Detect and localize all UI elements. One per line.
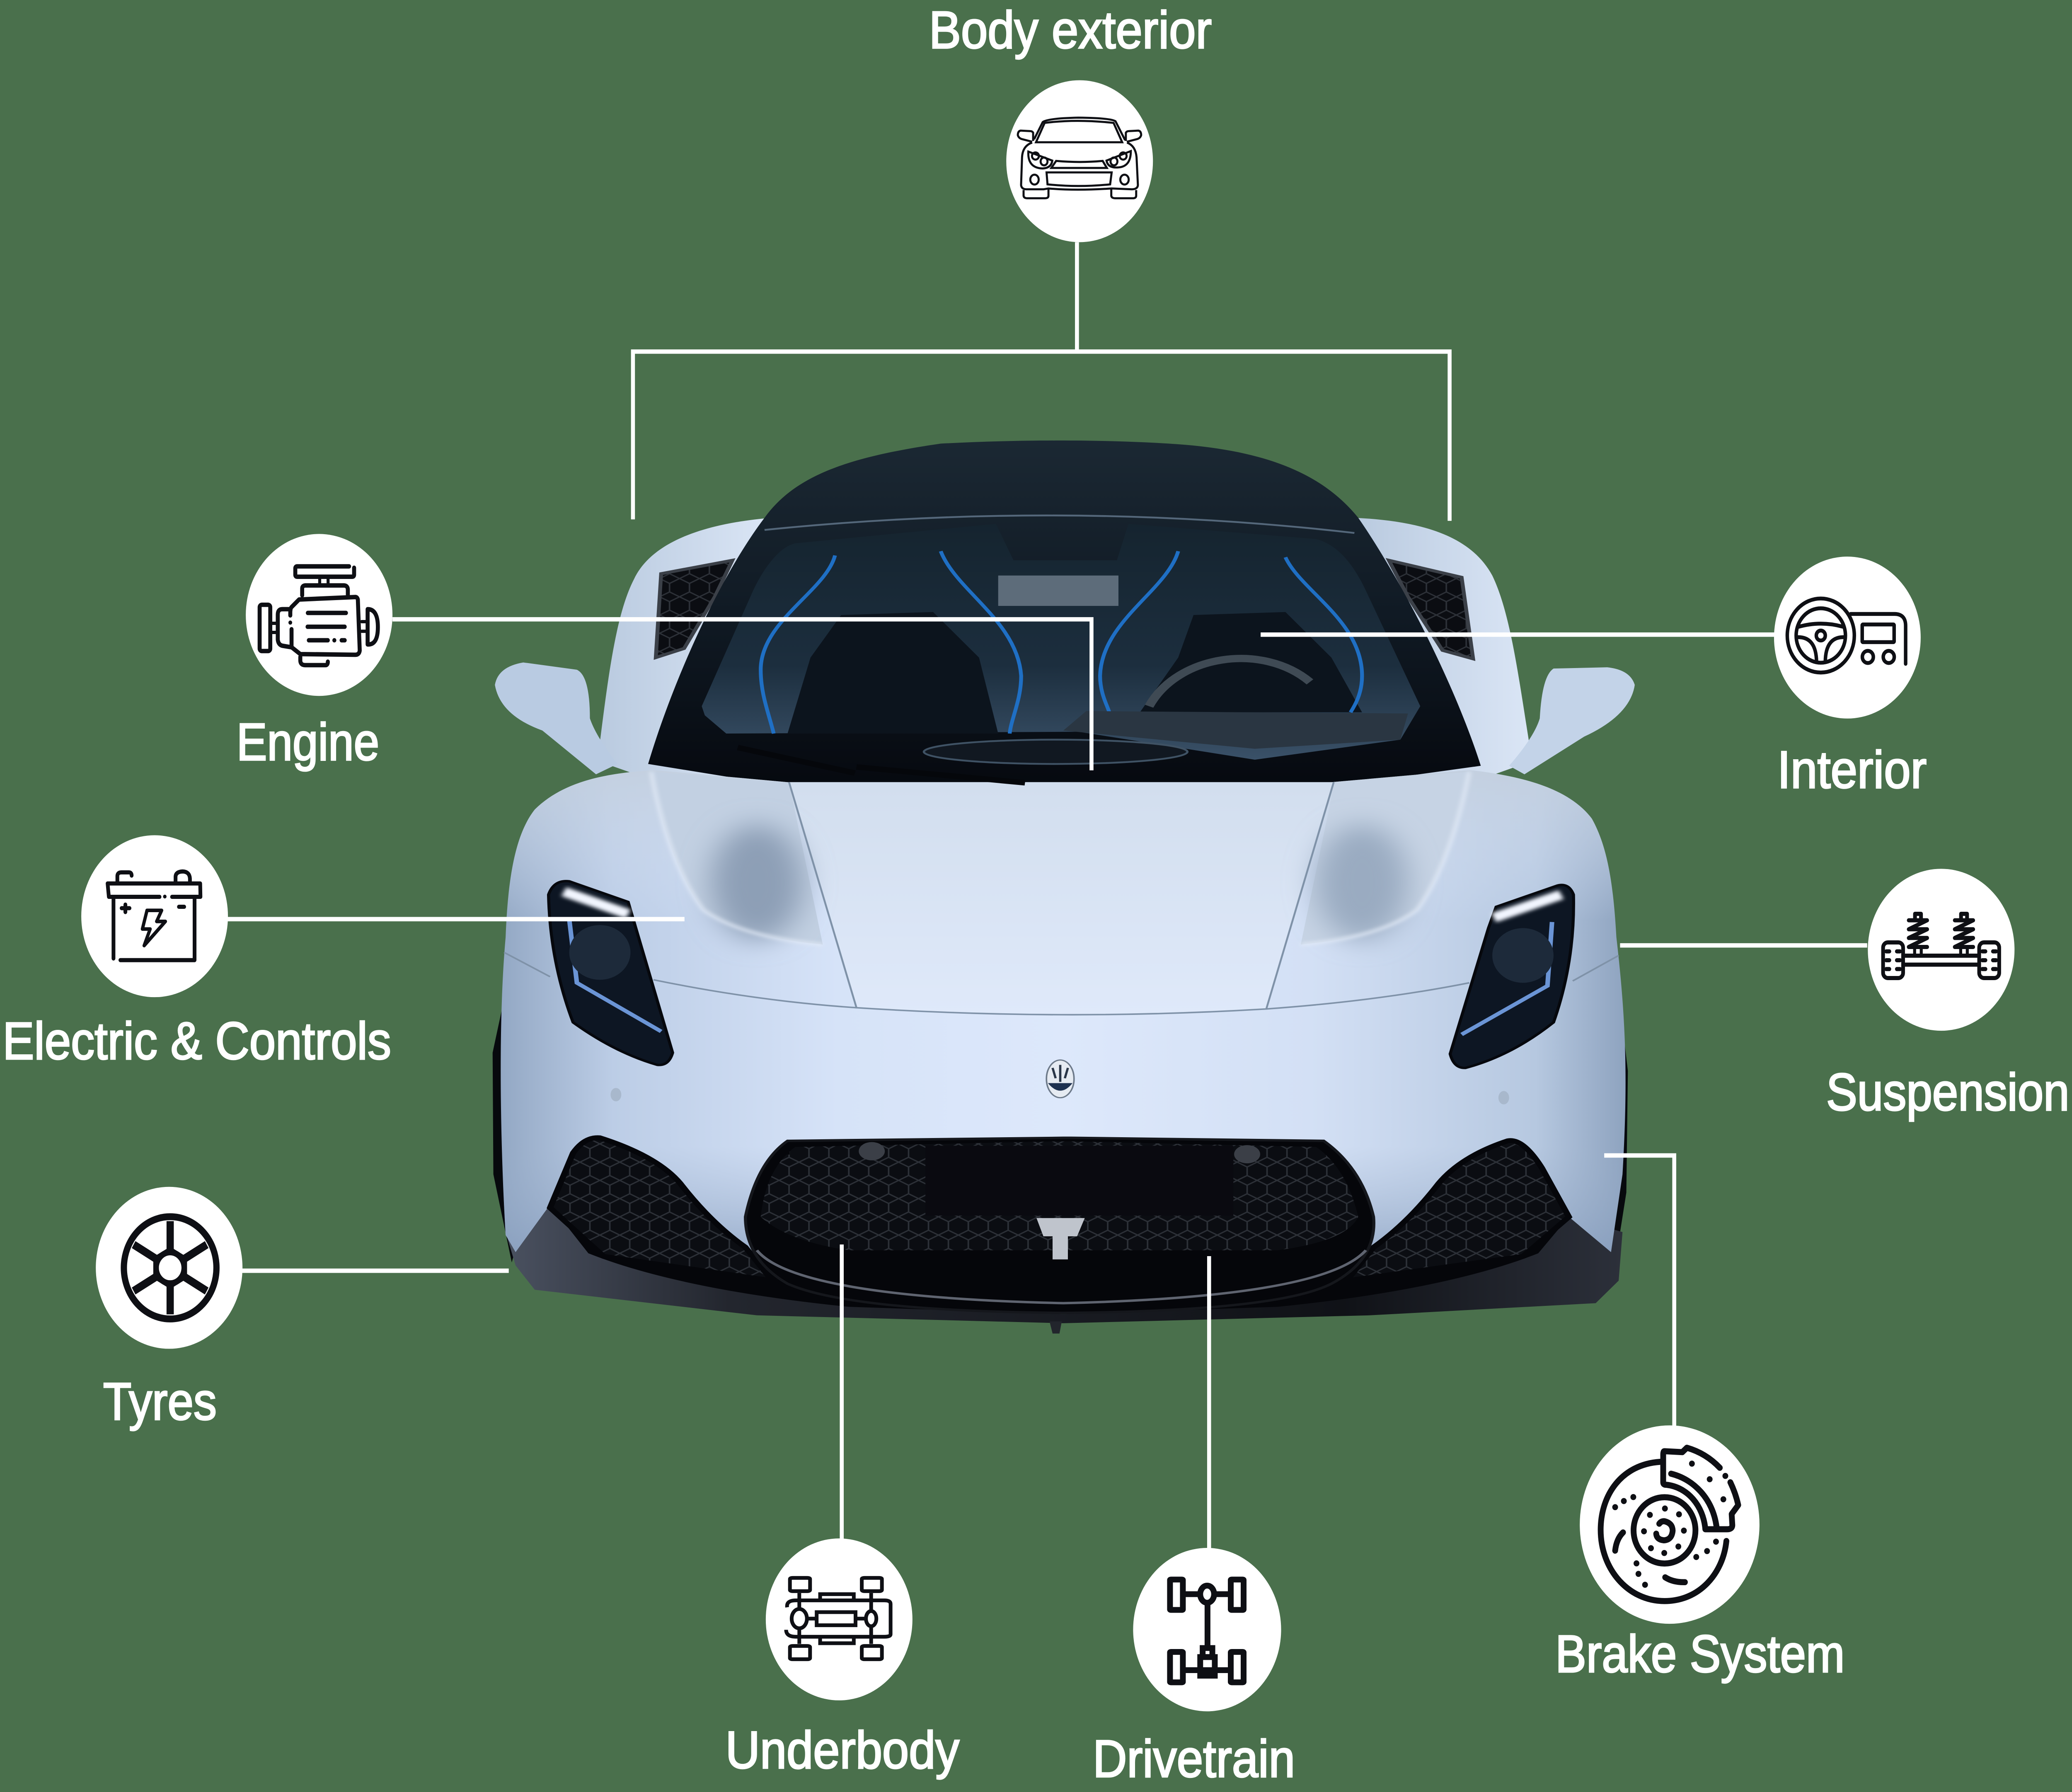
label: interior: Interior [1777, 741, 1927, 799]
connector: interior [1261, 634, 1775, 635]
connector: engine [392, 619, 1092, 770]
node: interior [1774, 557, 1927, 799]
node: brake system [1555, 1425, 1845, 1683]
label: drivetrain: Drivetrain [1093, 1729, 1295, 1788]
node: tyres [96, 1187, 242, 1431]
side air vents [656, 560, 1473, 659]
lower black underlay [550, 1205, 1569, 1312]
left air intake [550, 1138, 772, 1281]
label: tyres: Tyres [103, 1372, 217, 1431]
rear haunches [598, 518, 1532, 779]
label: brake system: Brake System [1555, 1625, 1845, 1683]
icon: battery [81, 835, 228, 997]
right bonnet scoop [1301, 772, 1469, 944]
node: drivetrain [1093, 1548, 1295, 1788]
node: engine [237, 534, 392, 771]
connector: tyres [242, 1270, 509, 1271]
label: engine: Engine [237, 713, 379, 771]
bonnet emblem [1046, 1060, 1074, 1098]
mirrors [495, 662, 1635, 774]
tow sensors [859, 1142, 885, 1160]
front grille [746, 1138, 1374, 1313]
blue seat stitching [761, 551, 1362, 734]
node: underbody [726, 1538, 960, 1780]
connector: drivetrain [1208, 1256, 1210, 1550]
connector: body exterior bracket [633, 242, 1450, 521]
number plate [925, 1146, 1233, 1216]
dashboard console [1063, 711, 1408, 749]
left headlight [549, 881, 673, 1065]
connector: brake system [1604, 1155, 1674, 1427]
left bonnet scoop [651, 772, 823, 944]
icon: drivetrain [1133, 1548, 1281, 1711]
steering wheel [1149, 659, 1310, 706]
label: electric and controls: Electric & Controls [2, 1012, 391, 1070]
heading: body exterior: Body exterior [929, 1, 1212, 59]
right headlight [1450, 885, 1573, 1068]
icon: wheel [96, 1187, 242, 1349]
windscreen glass [702, 516, 1420, 764]
label: suspension: Suspension [1826, 1063, 2070, 1121]
icon: brake disc [1580, 1425, 1760, 1624]
icon: steering wheel and dash [1774, 557, 1921, 719]
connector: suspension [1620, 945, 1867, 946]
parking sensors [610, 1088, 1509, 1104]
front splitter [506, 1205, 1622, 1323]
seats [787, 612, 1362, 734]
splitter tip [1050, 1321, 1062, 1334]
label: underbody: Underbody [726, 1721, 960, 1780]
icon: chassis [766, 1538, 913, 1700]
car photo illustration [493, 441, 1635, 1334]
node: electric and controls [2, 835, 391, 1070]
rear wheels behind the body [493, 992, 1628, 1266]
node: body exterior [929, 1, 1212, 242]
rearview mirror [998, 576, 1118, 606]
panel lines [504, 782, 1619, 1015]
connector: underbody [841, 1245, 842, 1539]
icon: suspension axle [1868, 869, 2014, 1031]
trident badge [1036, 1218, 1085, 1259]
icon: engine [246, 534, 392, 696]
main body shell [501, 770, 1626, 1271]
roof and windscreen frame [648, 441, 1481, 787]
icon: car front [1006, 80, 1153, 242]
dash vent [924, 740, 1187, 764]
wiper [738, 748, 1025, 783]
node: suspension [1826, 869, 2070, 1121]
connector: electric and controls [227, 918, 685, 920]
bonnet [789, 782, 1334, 1015]
right air intake [1347, 1141, 1569, 1281]
